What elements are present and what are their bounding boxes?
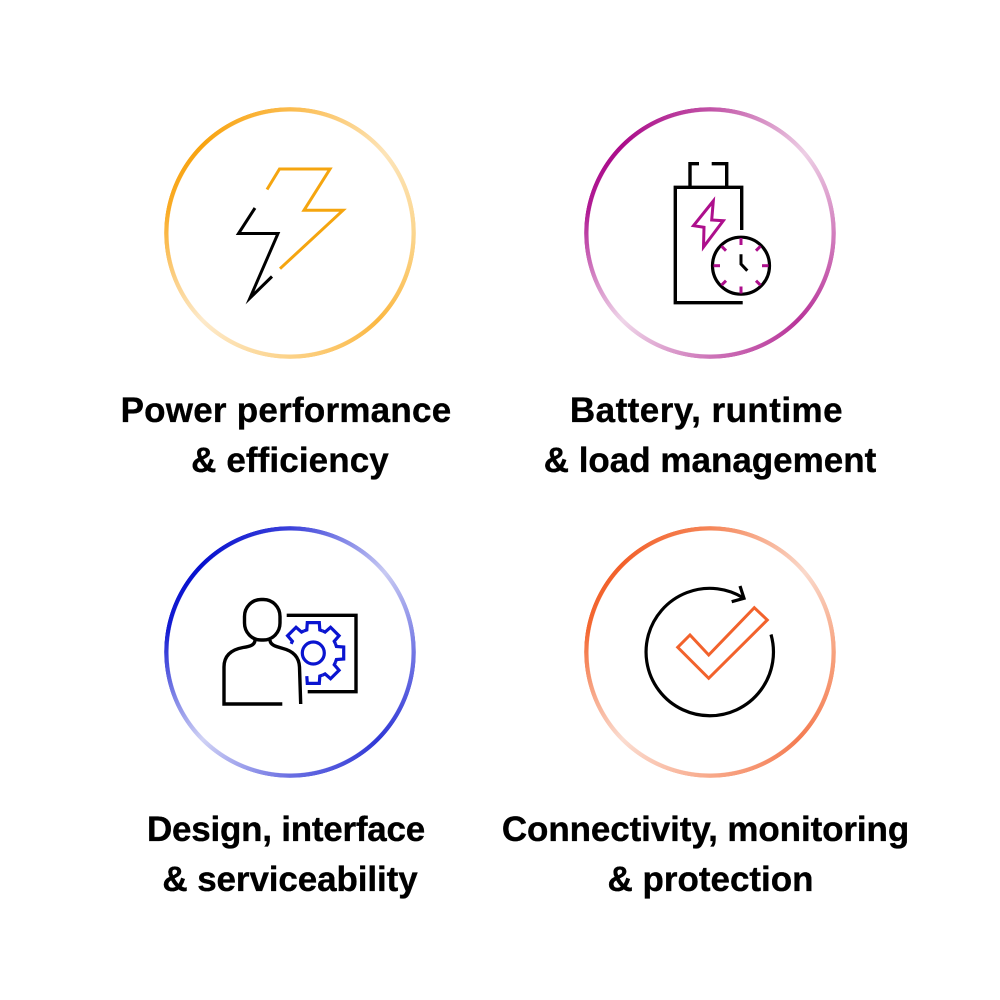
heading: connectivity monitoring: & protection bbox=[607, 860, 814, 899]
icon: battery with clock bbox=[675, 164, 770, 303]
icon: circular arrow with check mark bbox=[646, 586, 773, 716]
icon: person with gear bbox=[224, 600, 356, 704]
heading: power performance: Power performance bbox=[121, 391, 451, 430]
heading: battery runtime bbox=[544, 391, 876, 480]
ring: battery runtime bbox=[584, 107, 836, 359]
heading: battery runtime: & load management bbox=[544, 441, 876, 480]
heading: connectivity monitoring bbox=[502, 810, 909, 899]
heading: design interface: & serviceability bbox=[162, 860, 418, 899]
ring: connectivity monitoring bbox=[584, 526, 836, 778]
heading: connectivity monitoring: Connectivity, monitoring bbox=[502, 810, 909, 849]
ring: power performance bbox=[164, 107, 416, 359]
ring: design interface bbox=[164, 526, 416, 778]
heading: design interface bbox=[147, 810, 425, 899]
heading: design interface: Design, interface bbox=[147, 810, 425, 849]
heading: power performance: & efficiency bbox=[191, 441, 389, 480]
heading: power performance bbox=[121, 391, 451, 480]
heading: battery runtime: Battery, runtime bbox=[570, 391, 843, 430]
